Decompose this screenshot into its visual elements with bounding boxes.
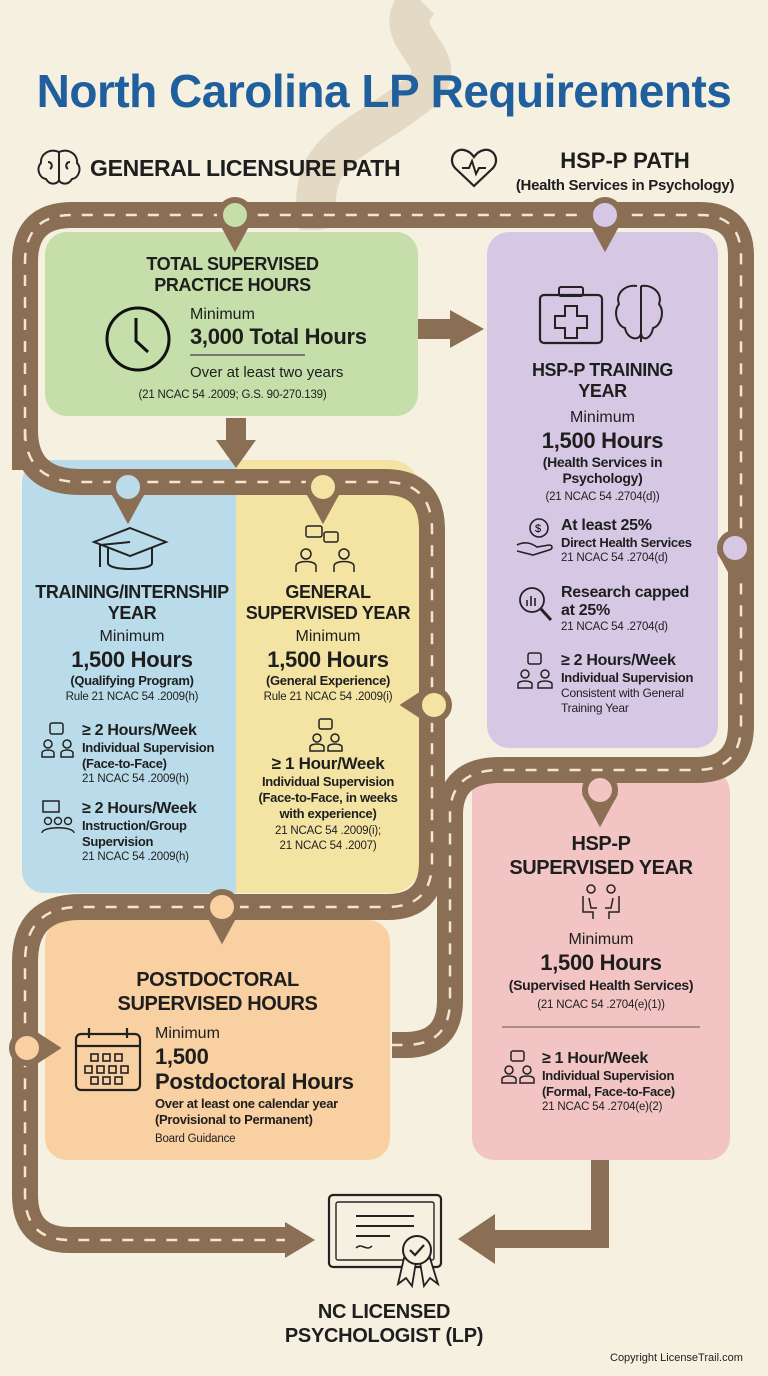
heading: SUPERVISED HOURS [118, 993, 317, 1015]
arrow: total down to training years [216, 418, 256, 468]
panel: HSP-P training year [487, 232, 718, 748]
heading [532, 360, 673, 401]
arrow: road to licensure (left) [285, 1222, 315, 1258]
item: individual supervision [517, 652, 693, 715]
header: general licensure path [38, 150, 400, 185]
item: research capped [519, 584, 689, 633]
item: group supervision [41, 800, 197, 863]
item: individual supervision: (Face-to-Face) [82, 756, 167, 771]
heading: PRACTICE HOURS [154, 275, 311, 295]
panel: postdoctoral supervised hours: Postdoctoral Hours [155, 1069, 354, 1094]
item: individual supervision: ≥ 2 Hours/Week [561, 652, 676, 669]
panel: general supervised year [236, 460, 420, 893]
heading: HSP-P TRAINING [532, 360, 673, 380]
panel: HSP-P training year: Minimum [570, 409, 635, 426]
panel: HSP-P supervised year [472, 770, 730, 1160]
pins [12, 200, 750, 1063]
final destination text: PSYCHOLOGIST (LP) [285, 1325, 483, 1347]
icon: supervision [309, 718, 343, 752]
text: 1 hour/week: Individual Supervision [262, 774, 394, 789]
panel: postdoctoral supervised hours: Minimum [155, 1025, 220, 1042]
heading: HSP-P [571, 833, 631, 855]
header: HSP-P path [450, 148, 734, 194]
panel: postdoctoral supervised hours: Over at least one calendar year [155, 1096, 338, 1111]
item: individual supervision: Individual Supervision [561, 670, 693, 685]
panel: training/internship year: Rule 21 NCAC 54 .2009(h) [66, 691, 198, 703]
heading: TOTAL SUPERVISED [146, 254, 319, 274]
heading: GENERAL [285, 582, 371, 602]
panel: total supervised practice hours: 3,000 Total Hours [190, 324, 367, 349]
icon: license certificate [328, 1194, 442, 1288]
text: 1 hour/week: with experience) [279, 806, 377, 821]
header: HSP-P path: HSP-P PATH [560, 148, 690, 173]
final destination text: NC LICENSED [318, 1301, 450, 1323]
panel: total supervised practice hours: Minimum [190, 306, 255, 323]
panel: general supervised year: Rule 21 NCAC 54 .2009(i) [264, 691, 392, 703]
item: direct health services: $ [535, 523, 541, 535]
text: 1 hour/week: 21 NCAC 54 .2007) [280, 840, 376, 852]
header: HSP-P path: (Health Services in Psychology) [516, 177, 734, 194]
copyright: Copyright LicenseTrail.com [610, 1352, 743, 1364]
panel: total supervised practice hours: Over at least two years [190, 364, 343, 381]
panel: training/internship year: Minimum [100, 628, 164, 645]
item: individual supervision [41, 722, 214, 785]
icon: clock [106, 306, 170, 372]
heading: YEAR [578, 381, 627, 401]
title: North Carolina LP Requirements [37, 65, 731, 117]
background winding road decoration [296, 0, 452, 230]
item: group supervision: 21 NCAC 54 .2009(h) [82, 851, 189, 863]
item: research capped: 21 NCAC 54 .2704(d) [561, 621, 668, 633]
item: group supervision: ≥ 2 Hours/Week [82, 800, 197, 817]
text: 1 hour/week: ≥ 1 Hour/Week [272, 754, 384, 773]
item: individual supervision: ≥ 2 Hours/Week [82, 722, 197, 739]
panel: general supervised year: 1,500 Hours [267, 647, 389, 672]
item: formal supervision [501, 1050, 675, 1113]
panel: training/internship year: (Qualifying Program) [70, 673, 194, 688]
item: direct health services [516, 517, 692, 564]
panel: postdoctoral supervised hours: (Provisional to Permanent) [155, 1112, 313, 1127]
icon: graduation cap [91, 526, 169, 570]
panel: HSP-P training year: (Health Services in [543, 454, 662, 470]
panel: general supervised year: Minimum [296, 628, 360, 645]
heading: YEAR [108, 603, 156, 623]
arrow: general to HSP-P [418, 310, 484, 348]
item: group supervision: Supervision [82, 834, 153, 849]
item: research capped: at 25% [561, 602, 610, 619]
arrow: HSP-P supervised to licensure [458, 1160, 609, 1264]
panel: HSP-P supervised year: 1,500 Hours [540, 950, 662, 975]
panel: general supervised year: (General Experience) [266, 673, 390, 688]
panel: postdoctoral supervised hours: Board Guidance [155, 1133, 235, 1145]
item: direct health services: At least 25% [561, 517, 652, 534]
panel: HSP-P training year: Psychology) [563, 470, 642, 486]
icon: medical kit and brain [538, 284, 663, 344]
panel: total supervised practice hours [45, 232, 418, 416]
text: 1 hour/week: 21 NCAC 54 .2009(i); [275, 825, 381, 837]
panel: postdoctoral supervised hours: 1,500 [155, 1044, 209, 1069]
final destination text [285, 1301, 483, 1347]
header: general licensure path: GENERAL LICENSURE PATH [90, 155, 400, 181]
icon: brain [38, 150, 80, 185]
icon: two seated people [582, 884, 620, 919]
icon: discussion [295, 525, 355, 572]
item: group supervision: Instruction/Group [82, 818, 187, 833]
heading [146, 254, 319, 295]
heading [246, 582, 410, 623]
item: individual supervision: Training Year [561, 701, 629, 715]
panel: HSP-P supervised year: (Supervised Health Services) [509, 977, 693, 993]
heading [509, 833, 693, 879]
heading [118, 969, 318, 1015]
icon: heart [450, 148, 498, 188]
item: direct health services: Direct Health Services [561, 535, 692, 550]
heading: SUPERVISED YEAR [246, 603, 410, 623]
panel: HSP-P supervised year: Minimum [569, 931, 633, 948]
panel: postdoctoral supervised hours [45, 920, 390, 1160]
item: formal supervision: Individual Supervision [542, 1068, 674, 1083]
heading: POSTDOCTORAL [136, 969, 299, 991]
item: formal supervision: 21 NCAC 54 .2704(e)(2) [542, 1101, 662, 1113]
heading [35, 582, 229, 623]
panel: total supervised practice hours: (21 NCAC 54 .2009; G.S. 90-270.139) [138, 389, 326, 401]
item: direct health services: 21 NCAC 54 .2704(d) [561, 552, 668, 564]
text: 1 hour/week [258, 754, 398, 852]
heading: TRAINING/INTERNSHIP [35, 582, 229, 602]
panel: training/internship year: 1,500 Hours [71, 647, 193, 672]
panel: HSP-P training year: (21 NCAC 54 .2704(d)) [545, 491, 660, 503]
panel: training/internship year [22, 460, 242, 893]
heading: SUPERVISED YEAR [509, 857, 693, 879]
item: individual supervision: Consistent with General [561, 686, 684, 700]
item: formal supervision: (Formal, Face-to-Face) [542, 1084, 675, 1099]
item: research capped: Research capped [561, 584, 689, 601]
panel: HSP-P training year: 1,500 Hours [542, 428, 663, 453]
item: individual supervision: Individual Supervision [82, 740, 214, 755]
item: formal supervision: ≥ 1 Hour/Week [542, 1050, 648, 1067]
panel: HSP-P supervised year: (21 NCAC 54 .2704(e)(1)) [537, 999, 665, 1011]
item: individual supervision: 21 NCAC 54 .2009(h) [82, 773, 189, 785]
icon: calendar [74, 1028, 142, 1092]
text: 1 hour/week: (Face-to-Face, in weeks [258, 790, 398, 805]
